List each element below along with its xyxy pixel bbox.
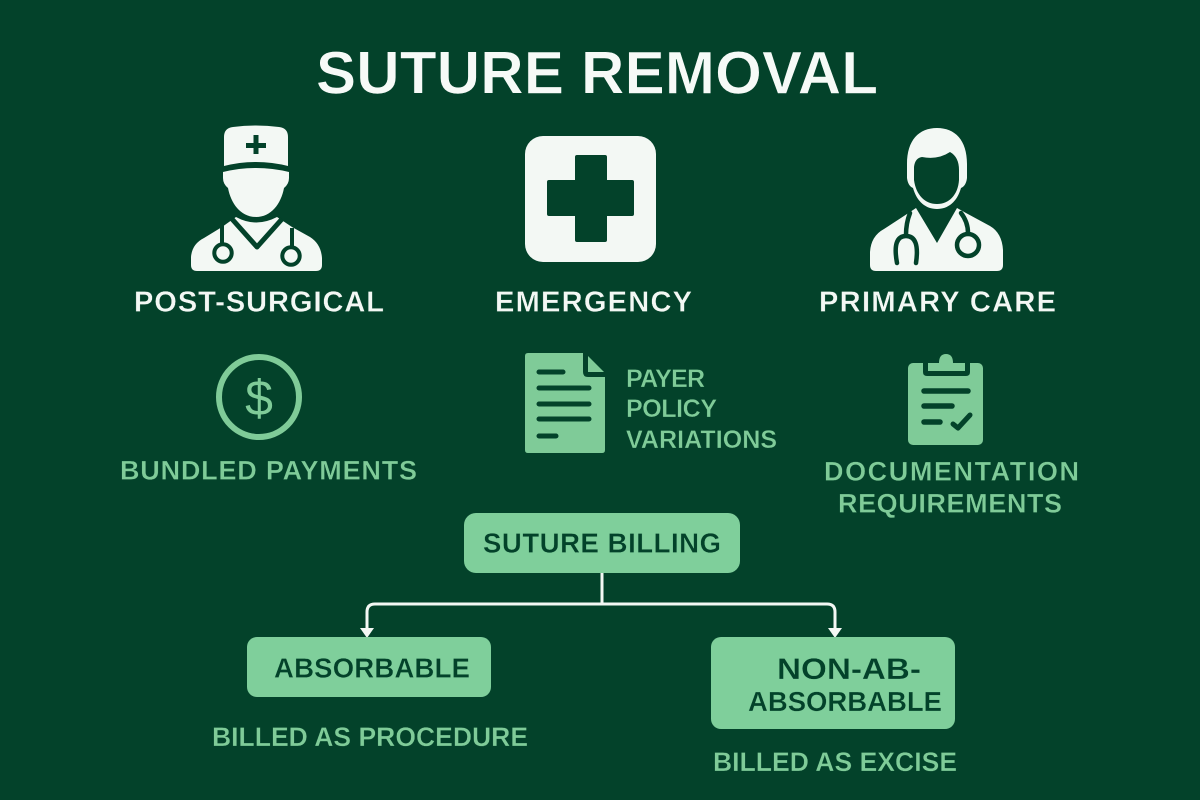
icon: policy document <box>525 353 605 453</box>
icon: doctor with stethoscope <box>870 128 1003 271</box>
label: payer policy variations: VARIATIONS <box>626 426 777 454</box>
icon: clipboard checklist <box>908 354 983 445</box>
icon: dollar coin <box>219 357 299 437</box>
heading: emergency: EMERGENCY <box>495 286 692 318</box>
label: bundled payments: BUNDLED PAYMENTS <box>120 456 417 486</box>
box: suture billing <box>464 513 740 573</box>
label: documentation requirements <box>824 456 1079 518</box>
label: payer policy variations: PAYER <box>626 365 705 393</box>
label: billed as procedure: BILLED AS PROCEDURE <box>212 722 528 752</box>
label: payer policy variations: POLICY <box>626 395 717 423</box>
label: documentation requirements: DOCUMENTATION <box>824 456 1079 486</box>
box: suture billing: SUTURE BILLING <box>483 528 721 558</box>
heading: primary care: PRIMARY CARE <box>819 286 1056 318</box>
box: absorbable: ABSORBABLE <box>274 652 470 684</box>
icon: emergency cross <box>525 136 656 262</box>
connector: billing tree arrows <box>360 573 842 638</box>
title: SUTURE REMOVAL <box>316 40 878 106</box>
label: payer policy variations <box>626 365 777 454</box>
box: absorbable <box>247 637 491 697</box>
box: non-absorbable: NON-AB- <box>777 653 921 686</box>
label: documentation requirements: REQUIREMENTS <box>838 488 1062 518</box>
icon: surgeon with cap and stethoscope <box>191 126 322 271</box>
box: non-absorbable <box>711 637 955 729</box>
heading: post-surgical: POST-SURGICAL <box>134 286 384 318</box>
label: billed as excise: BILLED AS EXCISE <box>713 747 957 777</box>
icon: dollar coin: $ <box>245 370 273 426</box>
box: non-absorbable: ABSORBABLE <box>748 686 942 717</box>
